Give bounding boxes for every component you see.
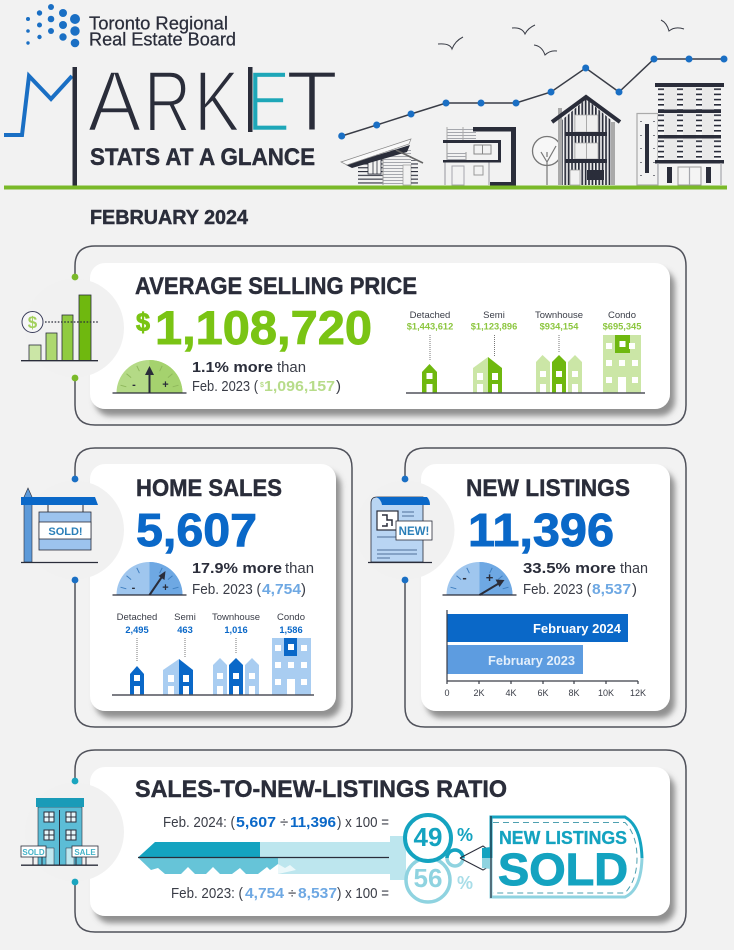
icon: sold sign: SOLD! [48,526,83,538]
housing type sales: 2,495 [125,625,149,635]
bar chart: 10K [598,688,614,698]
housing type prices: Detached [410,310,450,321]
big number: 5,607 [136,504,257,556]
big number: $ [136,307,151,337]
ground line [4,186,727,190]
icon: apartment for sale [21,798,98,865]
birds [438,20,684,55]
bar chart: 6K [537,688,549,698]
comparison text: Feb. 2023 ( [523,581,591,598]
logo: Toronto Regional Real Estate Board: Toronto Regional [89,14,228,34]
comparison text: ) [301,581,306,598]
comparison text: 1,096,157 [264,378,335,395]
bar chart: February 2024 [533,622,621,636]
formula 2024: ÷ [280,814,288,831]
heading: AVERAGE SELLING PRICE [135,273,417,300]
housing type sales: 1,016 [224,625,248,635]
comparison text: 4,754 [262,581,302,598]
icon: price bars: $ [28,313,38,332]
gauge [442,562,516,595]
sold tag: NEW LISTINGS [499,828,627,848]
housing type prices: Semi [483,310,505,321]
title: MARKET: R [144,54,191,150]
comparison text: ) [632,581,637,598]
housing type prices: Townhouse [535,310,583,321]
icon: apartment for sale: SOLD [22,848,45,857]
comparison text [192,560,314,598]
icon: new listing document [368,497,432,562]
house 2 [443,127,516,186]
illustration: skyline houses [341,83,724,186]
icon: price bars [21,295,98,361]
panel: sales-to-new-listings ratio [21,750,686,932]
gauge: - [132,582,136,594]
bar chart: 2K [473,688,485,698]
bar chart [444,610,646,698]
formula 2024: Feb. 2024: ( [163,814,235,831]
housing type prices: Condo [608,310,636,321]
panel: average selling price [21,246,686,425]
heading: HOME SALES [136,475,282,502]
comparison text: 8,537 [592,581,631,598]
formula 2024: 5,607 [236,814,276,831]
ratio rings: 56 [414,863,442,893]
housing type prices [406,310,645,393]
housing type sales: Townhouse [212,612,260,623]
ratio rings: 49 [414,822,442,852]
logo: Toronto Regional Real Estate Board [26,4,236,50]
comparison text: ) [336,378,341,395]
icon: new listing document: NEW! [399,526,429,538]
housing type prices: $1,443,612 [407,322,453,332]
gauge: - [462,570,467,585]
bar chart: 4K [505,688,517,698]
formula 2024 [163,814,389,831]
gauge: - [132,379,136,391]
housing type sales: Condo [277,612,305,623]
date heading: FEBRUARY 2024 [90,207,249,229]
title: MARKET: E [247,54,290,150]
ratio rings: % [457,873,473,893]
housing type sales: 1,586 [279,625,303,635]
ratio rings: % [457,825,473,845]
comparison text: than [620,560,648,577]
comparison text: Feb. 2023 ( [192,378,258,395]
sold tag: SOLD [498,844,628,895]
gauge: + [486,570,494,585]
bar chart: 8K [568,688,580,698]
bar chart: 0 [444,688,450,698]
housing type sales: Detached [117,612,157,623]
heading: NEW LISTINGS [466,475,630,502]
house 1 [341,139,423,185]
title: MARKET: A [88,54,142,150]
line chart across skyline [338,56,728,140]
icon: sold sign [21,488,98,562]
gauge [112,360,186,393]
title: MARKET: T [286,54,338,150]
tree [532,136,562,185]
comparison text: 33.5% more [523,560,616,577]
sold tag [482,816,642,898]
formula 2024: 11,396 [290,814,336,831]
bar chart: 12K [630,688,646,698]
logo: Toronto Regional Real Estate Board: Real Estate Board [89,30,236,50]
heading: SALES-TO-NEW-LISTINGS RATIO [135,776,507,803]
big number: 11,396 [468,504,614,556]
house 3 [552,97,620,185]
ratio rings [405,815,490,902]
title: MARKET [4,54,338,189]
housing type prices: $695,345 [603,322,641,332]
comparison text: 17.9% more [192,560,282,577]
comparison text: Feb. 2023 ( [192,581,261,598]
comparison text: than [277,359,306,376]
housing type sales: 463 [177,625,193,635]
gauge: + [162,379,169,391]
formula 2023: ÷ [288,885,296,902]
housing type sales: Semi [174,612,196,623]
subtitle: STATS AT A GLANCE [90,144,315,171]
formula 2023 [171,885,389,902]
formula 2023: Feb. 2023: ( [171,885,243,902]
title: MARKET: K [194,54,240,150]
icon: apartment for sale: SALE [74,848,96,857]
comparison text: than [285,560,314,577]
formula 2023: ) x 100 = [337,885,389,902]
bar chart: February 2023 [488,654,575,668]
formula 2023: 4,754 [245,885,285,902]
formula 2024: ) x 100 = [337,814,389,831]
panel: new listings [356,448,686,727]
big number: 1,108,720 [155,301,372,354]
key graphic [138,836,406,880]
comparison text [523,560,648,598]
comparison text: 1.1% more [192,359,273,376]
gauge: + [162,582,169,594]
housing type prices: $1,123,896 [471,322,517,332]
comparison text [192,359,341,395]
panel: home sales [21,448,352,727]
comparison text: $ [260,382,264,389]
building [637,83,724,185]
housing type sales [112,612,314,695]
gauge [112,562,186,595]
housing type prices: $934,154 [540,322,579,332]
formula 2023: 8,537 [298,885,337,902]
